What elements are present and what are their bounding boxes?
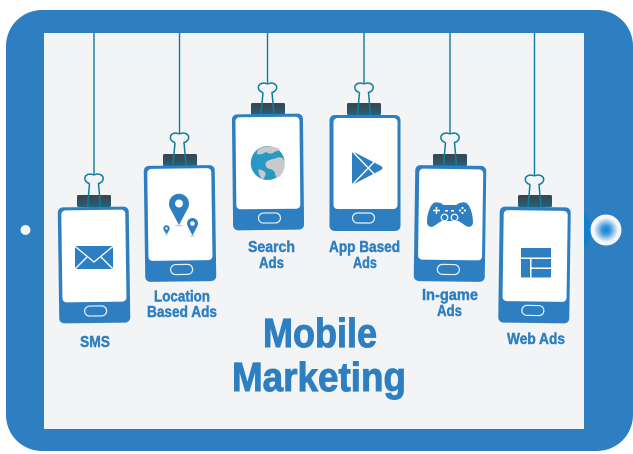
icon: play triangle xyxy=(351,150,382,186)
icon: web layout xyxy=(521,248,551,278)
phone body xyxy=(330,115,400,231)
title: Mobile Marketing: Mobile xyxy=(263,310,377,356)
phone body xyxy=(414,165,486,282)
label: In-game Ads: Ads xyxy=(437,303,462,320)
phone: In-game Ads xyxy=(414,133,486,282)
binder clip xyxy=(77,174,111,207)
title: Mobile Marketing: Marketing xyxy=(232,354,406,400)
tablet home button xyxy=(584,213,622,247)
label: Location Based Ads: Location xyxy=(154,288,210,306)
phone body xyxy=(498,207,571,323)
phone body xyxy=(58,207,130,323)
binder clip xyxy=(347,83,381,115)
label: App Based Ads: App Based xyxy=(329,239,400,256)
title: Mobile Marketing xyxy=(232,310,406,400)
label: SMS: SMS xyxy=(80,334,110,351)
hanging strings xyxy=(94,33,534,175)
icon: map pins xyxy=(163,194,198,237)
icon: envelope xyxy=(74,246,114,270)
label: In-game Ads xyxy=(422,287,478,320)
binder clip xyxy=(433,133,467,166)
label: In-game Ads: In-game xyxy=(422,287,478,304)
phone: Web Ads xyxy=(498,175,571,323)
phone: SMS xyxy=(58,174,130,323)
binder clip xyxy=(518,175,552,207)
label: Search Ads: Search xyxy=(248,239,295,256)
binder clip xyxy=(163,133,197,166)
phone: App Based Ads xyxy=(330,83,400,231)
label: Location Based Ads: Based Ads xyxy=(147,304,217,321)
tablet screen xyxy=(44,33,584,429)
label: App Based Ads xyxy=(329,239,400,272)
label: Location Based Ads xyxy=(147,288,217,321)
label: Web Ads: Web Ads xyxy=(507,331,565,348)
phone: Search Ads xyxy=(232,83,304,230)
label: Search Ads: Ads xyxy=(259,255,284,272)
icon: game controller xyxy=(427,202,473,227)
phone: Location Based Ads xyxy=(144,133,216,282)
tablet camera dot xyxy=(20,225,30,235)
icon: globe xyxy=(251,146,285,180)
phone body xyxy=(144,165,216,282)
label: Search Ads xyxy=(248,239,295,272)
label: App Based Ads: Ads xyxy=(353,255,377,272)
phone body xyxy=(232,114,304,230)
binder clip xyxy=(251,83,285,115)
